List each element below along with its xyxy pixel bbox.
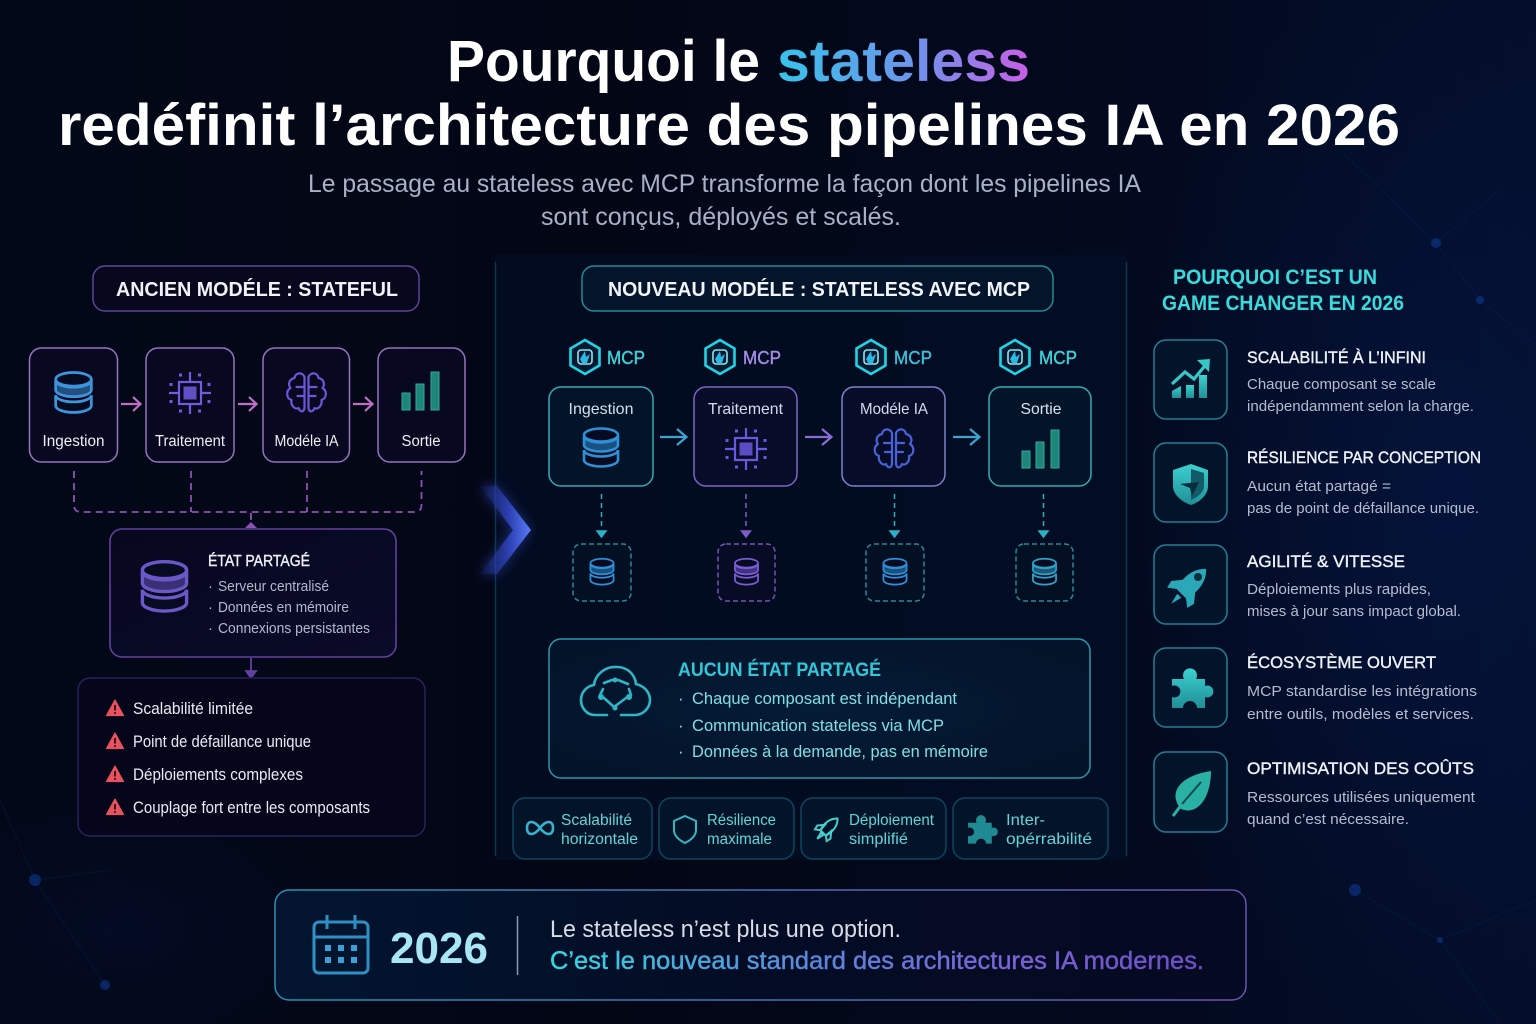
arrow: chevron old to new xyxy=(480,486,531,574)
MCP badge 3: MCP xyxy=(894,348,932,368)
panel: ancien modèle stateful xyxy=(30,266,465,836)
MCP badge 4: MCP xyxy=(1039,348,1077,368)
benefit: scalabilité xyxy=(1154,340,1474,419)
benefit: écosystème: MCP standardise les intégrations xyxy=(1247,683,1477,700)
local store 4 xyxy=(1016,544,1073,601)
heading: nouveau modèle xyxy=(582,266,1053,311)
benefit: résilience: RÉSILIENCE PAR CONCEPTION xyxy=(1247,448,1481,467)
dashed link 3 xyxy=(890,494,899,537)
benefit: optimisation xyxy=(1154,752,1476,832)
stage: traitement: Traitement xyxy=(708,401,784,418)
benefit: scalabilité: SCALABILITÉ À L’INFINI xyxy=(1247,348,1426,367)
title: Pourquoi le xyxy=(447,29,760,94)
MCP badge 2 xyxy=(706,340,781,374)
panel: aucun état partagé: · xyxy=(678,716,684,735)
MCP badge 1 xyxy=(570,340,645,374)
icon: cloud xyxy=(581,667,650,715)
panel: état partagé: Données en mémoire xyxy=(218,600,349,616)
chip: déploiement simplifié: simplifié xyxy=(849,831,908,848)
stage: modèle IA: Modéle IA xyxy=(860,401,928,418)
panel: état partagé: ÉTAT PARTAGÉ xyxy=(208,553,310,570)
panel: état partagé: · xyxy=(208,579,213,595)
risk: scalabilité: Scalabilité limitée xyxy=(133,700,253,718)
chip: résilience maximale xyxy=(659,798,794,859)
benefit: agilité: AGILITÉ & VITESSE xyxy=(1247,552,1405,571)
arrow xyxy=(238,397,256,411)
heading: ancien modèle: ANCIEN MODÉLE : STATEFUL xyxy=(116,278,398,301)
MCP badge 2: MCP xyxy=(743,348,781,368)
benefit: optimisation: Ressources utilisées uniquement xyxy=(1247,789,1476,806)
panel: aucun état partagé: Chaque composant est indépendant xyxy=(692,689,957,708)
panel: risks xyxy=(78,678,425,836)
stage: traitement xyxy=(694,387,797,486)
benefit: agilité: Déploiements plus rapides, xyxy=(1247,581,1431,598)
MCP badge 4 xyxy=(1000,340,1077,374)
panel: aucun état partagé: Communication stateless via MCP xyxy=(692,716,944,735)
panel: aucun état partagé: · xyxy=(678,742,684,761)
risk: couplage: Couplage fort entre les composants xyxy=(133,799,370,817)
stage: ingestion xyxy=(549,387,653,486)
local store 1 xyxy=(573,544,631,601)
MCP badge 1: MCP xyxy=(607,348,645,368)
banner: conclusion 2026: 2026 xyxy=(390,924,488,973)
pipeline stage: modèle IA xyxy=(263,348,350,462)
chip: scalabilité horizontale: Scalabilité xyxy=(561,812,632,829)
benefit: scalabilité: indépendamment selon la charge. xyxy=(1247,398,1474,415)
chip: interopérabilité: opérrabilité xyxy=(1006,831,1092,848)
panel: nouveau modèle stateless xyxy=(495,255,1127,860)
heading: game changer: GAME CHANGER EN 2026 xyxy=(1162,292,1404,315)
heading: game changer xyxy=(1162,266,1404,315)
panel: game changer xyxy=(1154,266,1481,832)
benefit: écosystème xyxy=(1154,648,1477,727)
pipeline stage: traitement xyxy=(146,348,234,462)
arrow xyxy=(805,429,832,445)
panel: état partagé xyxy=(110,529,396,657)
panel: état partagé: Serveur centralisé xyxy=(218,579,329,595)
panel: état partagé: · xyxy=(208,600,213,616)
chip: scalabilité horizontale xyxy=(513,798,652,859)
chip: interopérabilité xyxy=(953,798,1108,859)
dashed link 1 xyxy=(597,494,606,537)
subtitle: Le passage au stateless avec MCP transforme la façon dont les pipelines IA xyxy=(308,170,1141,198)
panel: état partagé: Connexions persistantes xyxy=(218,621,370,637)
benefit: agilité: mises à jour sans impact global. xyxy=(1247,603,1461,620)
arrow: state to risks xyxy=(246,658,256,678)
chip: déploiement simplifié: Déploiement xyxy=(849,812,935,829)
icon: calendar xyxy=(314,915,368,973)
dashed link 4 xyxy=(1039,494,1048,537)
heading: game changer: POURQUOI C’EST UN xyxy=(1173,266,1377,289)
subtitle: sont conçus, déployés et scalés. xyxy=(541,203,901,231)
pipeline stage: traitement: Traitement xyxy=(155,433,226,450)
benefit: résilience: pas de point de défaillance unique. xyxy=(1247,500,1479,517)
risk: déploiements: Déploiements complexes xyxy=(133,766,303,784)
chip: résilience maximale: Résilience xyxy=(707,812,776,829)
panel: aucun état partagé: · xyxy=(678,689,684,708)
heading: ancien modèle xyxy=(93,266,419,311)
benefit: résilience: Aucun état partagé = xyxy=(1247,478,1391,495)
chip: résilience maximale: maximale xyxy=(707,831,772,848)
panel: aucun état partagé: Données à la demande, pas en mémoire xyxy=(692,742,988,761)
subtitle xyxy=(308,170,1141,231)
local store 2 xyxy=(718,544,775,601)
stage: ingestion: Ingestion xyxy=(568,401,634,418)
banner: conclusion 2026: C’est le nouveau standard des architectures IA modernes. xyxy=(550,947,1204,975)
benefit: résilience xyxy=(1154,443,1481,522)
arrow xyxy=(353,397,372,411)
panel: aucun état partagé: AUCUN ÉTAT PARTAGÉ xyxy=(678,659,881,681)
benefit: scalabilité: Chaque composant se scale xyxy=(1247,376,1436,393)
benefit: optimisation: OPTIMISATION DES COÛTS xyxy=(1247,759,1474,778)
arrow xyxy=(953,429,980,445)
MCP badge 3 xyxy=(856,340,932,374)
heading: nouveau modèle: NOUVEAU MODÉLE : STATELESS AVEC MCP xyxy=(608,278,1030,301)
arrow xyxy=(121,397,140,411)
dashed connectors to shared state xyxy=(74,471,422,528)
local store 3 xyxy=(866,544,924,601)
panel: aucun état partagé xyxy=(549,639,1090,778)
stage: sortie xyxy=(989,387,1091,486)
benefit: optimisation: quand c’est nécessaire. xyxy=(1247,811,1409,828)
pipeline stage: ingestion: Ingestion xyxy=(42,433,104,450)
icon: shared database xyxy=(142,562,187,611)
stage: modèle IA xyxy=(842,387,945,486)
title: stateless xyxy=(777,29,1030,94)
pipeline stage: modèle IA: Modéle IA xyxy=(274,433,339,450)
dashed link 2 xyxy=(742,494,750,537)
benefit: écosystème: entre outils, modèles et services. xyxy=(1247,706,1474,723)
benefit: agilité xyxy=(1154,545,1461,624)
chip: déploiement simplifié xyxy=(801,798,946,859)
chip: scalabilité horizontale: horizontale xyxy=(561,831,638,848)
panel: état partagé: · xyxy=(208,621,213,637)
title xyxy=(58,29,1400,158)
risk: défaillance: Point de défaillance unique xyxy=(133,733,311,751)
benefit: écosystème: ÉCOSYSTÈME OUVERT xyxy=(1247,653,1436,672)
pipeline stage: sortie xyxy=(378,348,465,462)
pipeline stage: ingestion xyxy=(30,348,118,462)
chip: interopérabilité: Inter- xyxy=(1006,812,1045,829)
arrow xyxy=(660,429,686,445)
stage: sortie: Sortie xyxy=(1020,401,1062,418)
pipeline stage: sortie: Sortie xyxy=(402,433,440,450)
banner: conclusion 2026: Le stateless n’est plus une option. xyxy=(550,916,901,943)
title: redéfinit l’architecture des pipelines IA en 2026 xyxy=(58,93,1400,158)
banner: conclusion 2026 xyxy=(275,890,1246,1000)
